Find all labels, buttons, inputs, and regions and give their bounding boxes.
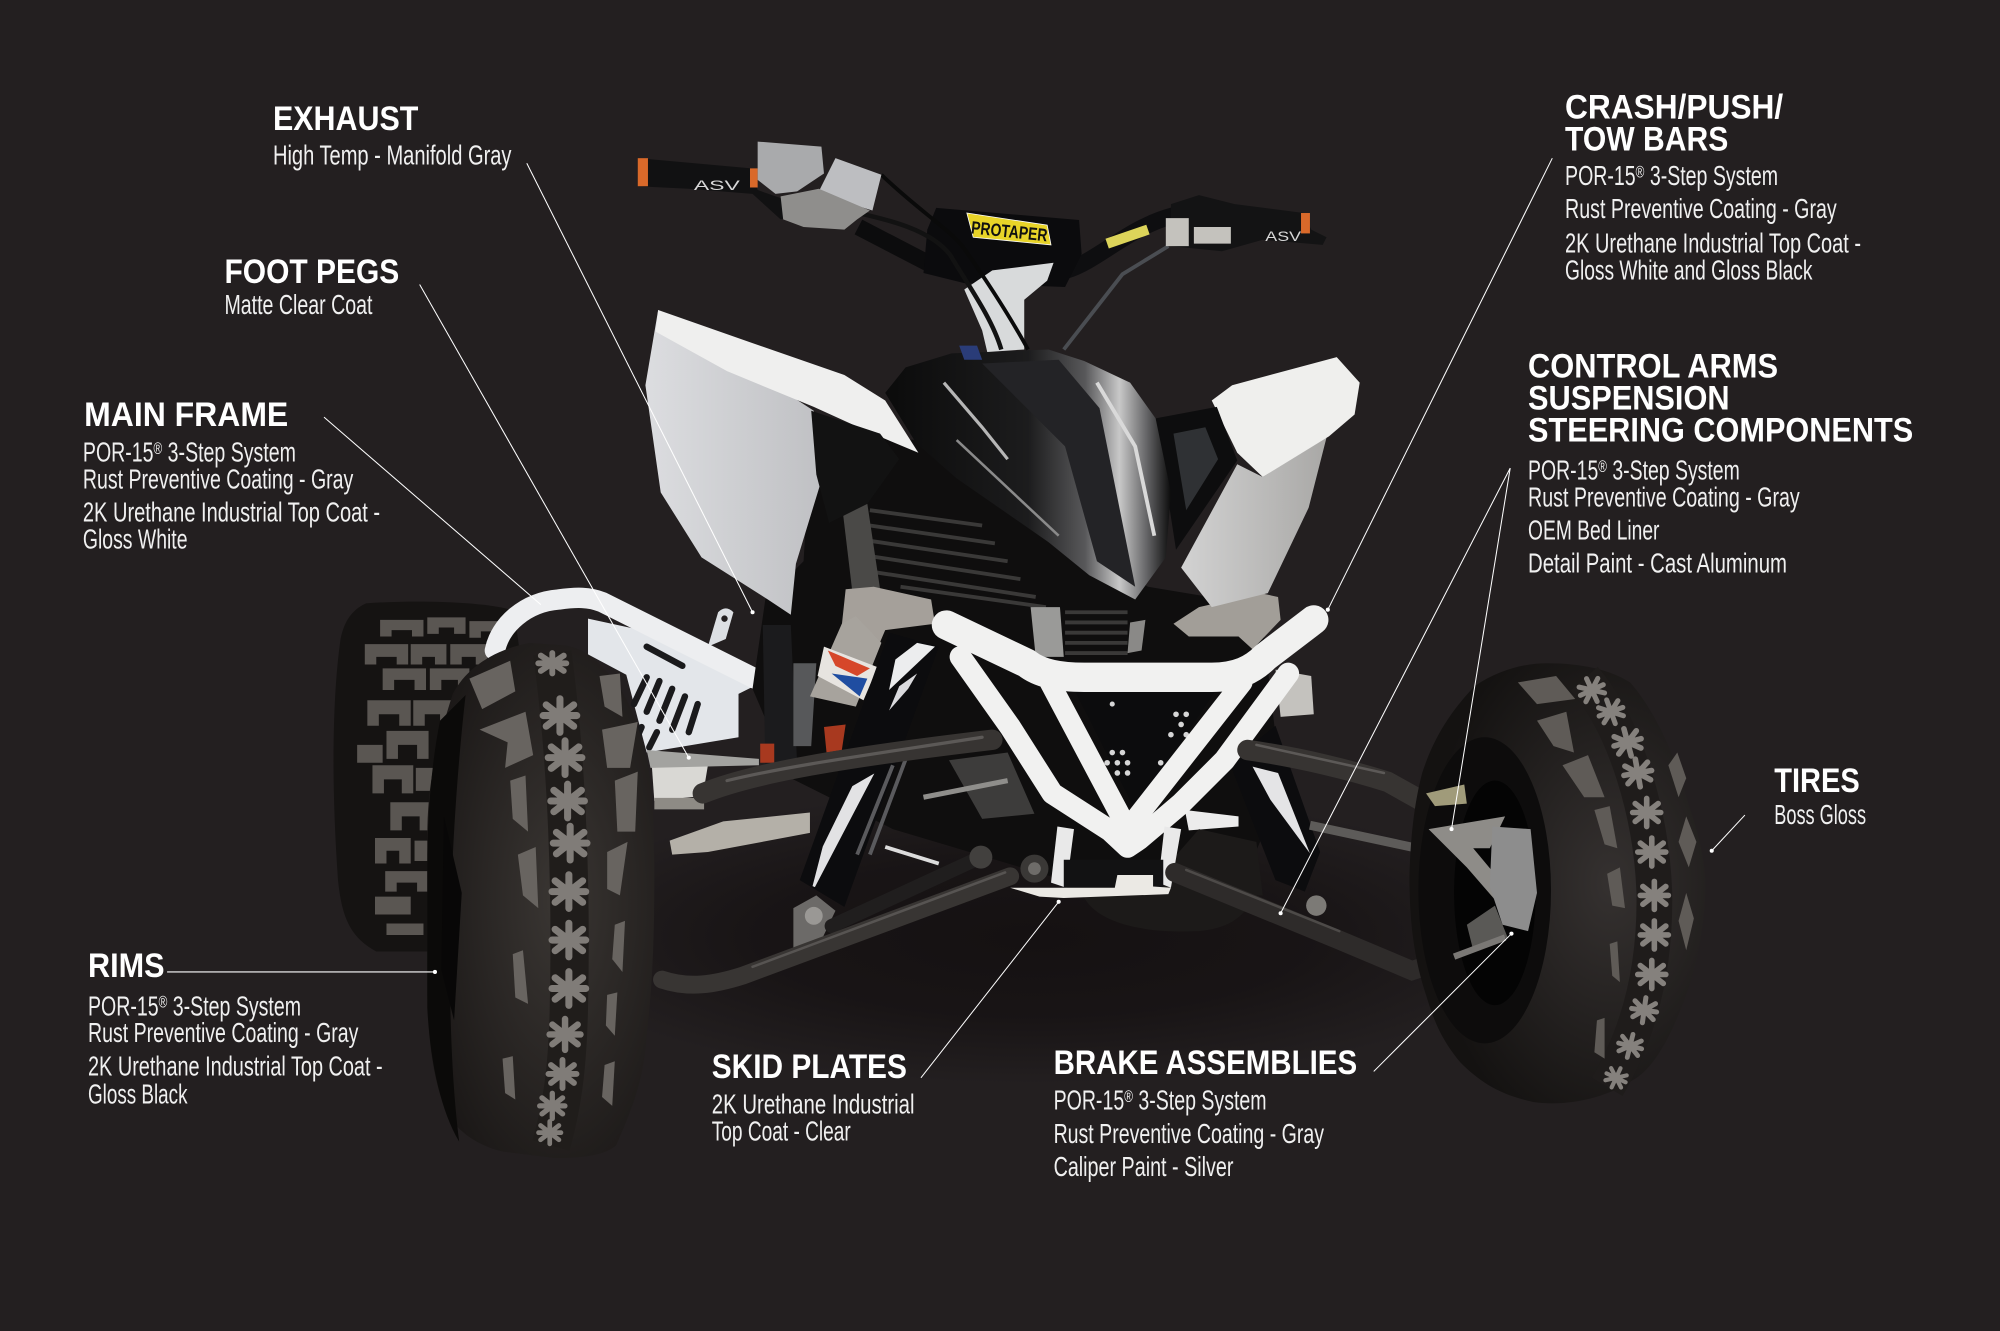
left shock absorber (793, 616, 939, 950)
leader line: rims (167, 970, 437, 974)
callout: control arms suspension steering: ® (1598, 457, 1607, 476)
radiator mesh (1074, 689, 1217, 810)
callout: control arms suspension steering: STEERING COMPONENTS (1528, 411, 1913, 449)
coolant elbow left (842, 587, 935, 648)
side tread blocks (1518, 676, 1696, 1059)
illustration: quad bike (334, 142, 1705, 1158)
callout: skid plates: Top Coat - Clear (712, 1115, 851, 1146)
exhaust side (763, 625, 797, 765)
throttle cable (1064, 246, 1168, 349)
callout: rims: 3-Step System (167, 990, 301, 1021)
callout: control arms suspension steering (1528, 348, 1913, 579)
callout: brake assemblies: 3-Step System (1133, 1085, 1267, 1116)
callout: main frame: Rust Preventive Coating - Gray (83, 464, 354, 495)
callout: control arms suspension steering: SUSPENSION (1528, 379, 1730, 417)
callout: tires (1774, 762, 1866, 830)
dark tread channel (551, 653, 570, 1145)
rear tire under skid plate (1083, 829, 1263, 932)
brake cables (881, 175, 1028, 349)
callout: skid plates: 2K Urethane Industrial (712, 1089, 915, 1120)
handlebar right tube (1066, 216, 1173, 270)
leader line: brake assemblies (1374, 932, 1514, 1071)
center tread column (538, 653, 587, 1144)
crossbar pad (923, 208, 1082, 287)
callout: rims: 2K Urethane Industrial Top Coat - (88, 1050, 383, 1081)
upper left control arm (703, 737, 992, 793)
lower left plate (670, 813, 810, 855)
leader line: foot pegs (420, 284, 691, 760)
dark tread channel (1584, 679, 1654, 1087)
left grip (638, 158, 816, 219)
callout: foot pegs: FOOT PEGS (224, 253, 399, 291)
callout: brake assemblies: ® (1124, 1087, 1133, 1106)
callout: rims: RIMS (88, 947, 165, 985)
lower left control arm (662, 846, 1048, 985)
right fender (1181, 357, 1360, 607)
foot peg (647, 750, 759, 768)
callout: foot pegs (224, 253, 399, 320)
callout: crash push tow bars: CRASH/PUSH/ (1565, 89, 1784, 127)
callout: crash push tow bars: TOW BARS (1565, 121, 1728, 159)
brand badge (967, 213, 1051, 245)
side tread blocks (469, 661, 638, 1106)
callout: control arms suspension steering: CONTROL ARMS (1528, 348, 1778, 386)
callout: crash push tow bars: Rust Preventive Coating - Gray (1565, 193, 1837, 224)
callout: main frame: MAIN FRAME (84, 396, 288, 434)
upper right control arm (1247, 745, 1422, 801)
handlebar stem (964, 263, 1054, 352)
leader line: crash bars (1326, 158, 1552, 612)
callout: control arms suspension steering: Detail Paint - Cast Aluminum (1528, 548, 1787, 579)
callout: exhaust: EXHAUST (273, 100, 418, 138)
left grip label: ASV (694, 177, 741, 193)
fuel tank and front cowl (885, 346, 1237, 599)
callout: tires: Boss Gloss (1774, 799, 1866, 830)
brand badge: PROTAPER (970, 218, 1049, 245)
callout: main frame: 3-Step System (162, 437, 296, 468)
front bumper and crash bars (946, 620, 1314, 888)
callout: control arms suspension steering: 3-Step System (1607, 455, 1740, 486)
callout: main frame: Gloss White (83, 523, 188, 554)
cylinder fins (870, 510, 1128, 653)
center tread column (1575, 673, 1668, 1092)
callout: rims (88, 947, 383, 1109)
coolant elbow right (1173, 593, 1281, 649)
callout: exhaust: High Temp - Manifold Gray (273, 140, 512, 171)
tie rod (1310, 825, 1417, 848)
brake caliper (1490, 827, 1537, 931)
lower panel (949, 753, 1034, 819)
callout: rims: POR-15 (88, 990, 187, 1021)
handlebar assembly (638, 142, 1327, 352)
right grip label: ASV (1265, 228, 1302, 244)
callout: rims: ® (159, 993, 167, 1012)
callout: brake assemblies: Caliper Paint - Silver (1054, 1151, 1233, 1182)
leader line: tires (1710, 815, 1745, 853)
callout: brake assemblies: Rust Preventive Coating - Gray (1054, 1118, 1324, 1149)
callout: control arms suspension steering: OEM Bed Liner (1528, 515, 1659, 546)
callout: brake assemblies: BRAKE ASSEMBLIES (1054, 1044, 1357, 1082)
callout: tires: TIRES (1774, 762, 1860, 800)
right controls (1171, 195, 1327, 251)
callout: crash push tow bars: POR-15 (1565, 160, 1664, 191)
handlebar left tube (858, 227, 927, 263)
wheel rim (1418, 737, 1551, 1043)
leader line: skid plates (921, 900, 1061, 1078)
leader line: exhaust (527, 163, 755, 614)
rear tire (334, 602, 536, 952)
skid plate (1010, 860, 1171, 898)
callout: main frame (83, 396, 380, 554)
right shock absorber (1230, 670, 1327, 916)
callout: crash push tow bars: Gloss White and Gloss Black (1565, 254, 1813, 285)
callout: main frame: ® (154, 439, 162, 458)
callout: skid plates: SKID PLATES (712, 1048, 907, 1086)
callout: crash push tow bars: 3-Step System (1644, 160, 1778, 191)
callout: control arms suspension steering: Rust Preventive Coating - Gray (1528, 481, 1800, 512)
brake master cylinder (758, 142, 881, 230)
left front tire (427, 643, 654, 1158)
callout: brake assemblies: POR-15 (1054, 1085, 1153, 1116)
upright (1426, 784, 1467, 806)
callout: crash push tow bars: 2K Urethane Industrial Top Coat - (1565, 228, 1861, 259)
engine and central dark mass (647, 434, 1282, 880)
main frame tube and heel guard (495, 598, 755, 753)
callout: crash push tow bars (1565, 89, 1861, 285)
leader line: main frame (324, 417, 541, 605)
callout: rims: Gloss Black (88, 1078, 188, 1109)
right front tire (1409, 663, 1705, 1103)
callout: brake assemblies (1054, 1044, 1357, 1182)
callout: main frame: POR-15 (83, 437, 182, 468)
tie rod left (654, 799, 704, 808)
lower right control arm (1175, 870, 1454, 971)
floor shadow (523, 791, 1543, 1084)
left fender (645, 310, 918, 615)
callout: skid plates (712, 1048, 915, 1146)
clamps (824, 724, 846, 753)
callout: crash push tow bars: ® (1636, 162, 1644, 181)
callout: foot pegs: Matte Clear Coat (224, 289, 373, 320)
callout: exhaust (273, 100, 512, 171)
callout: main frame: 2K Urethane Industrial Top Coat - (83, 497, 380, 528)
callout: control arms suspension steering: POR-15 (1528, 455, 1627, 486)
callout: rims: Rust Preventive Coating - Gray (88, 1017, 359, 1048)
leader lines: control arms (1279, 468, 1510, 915)
